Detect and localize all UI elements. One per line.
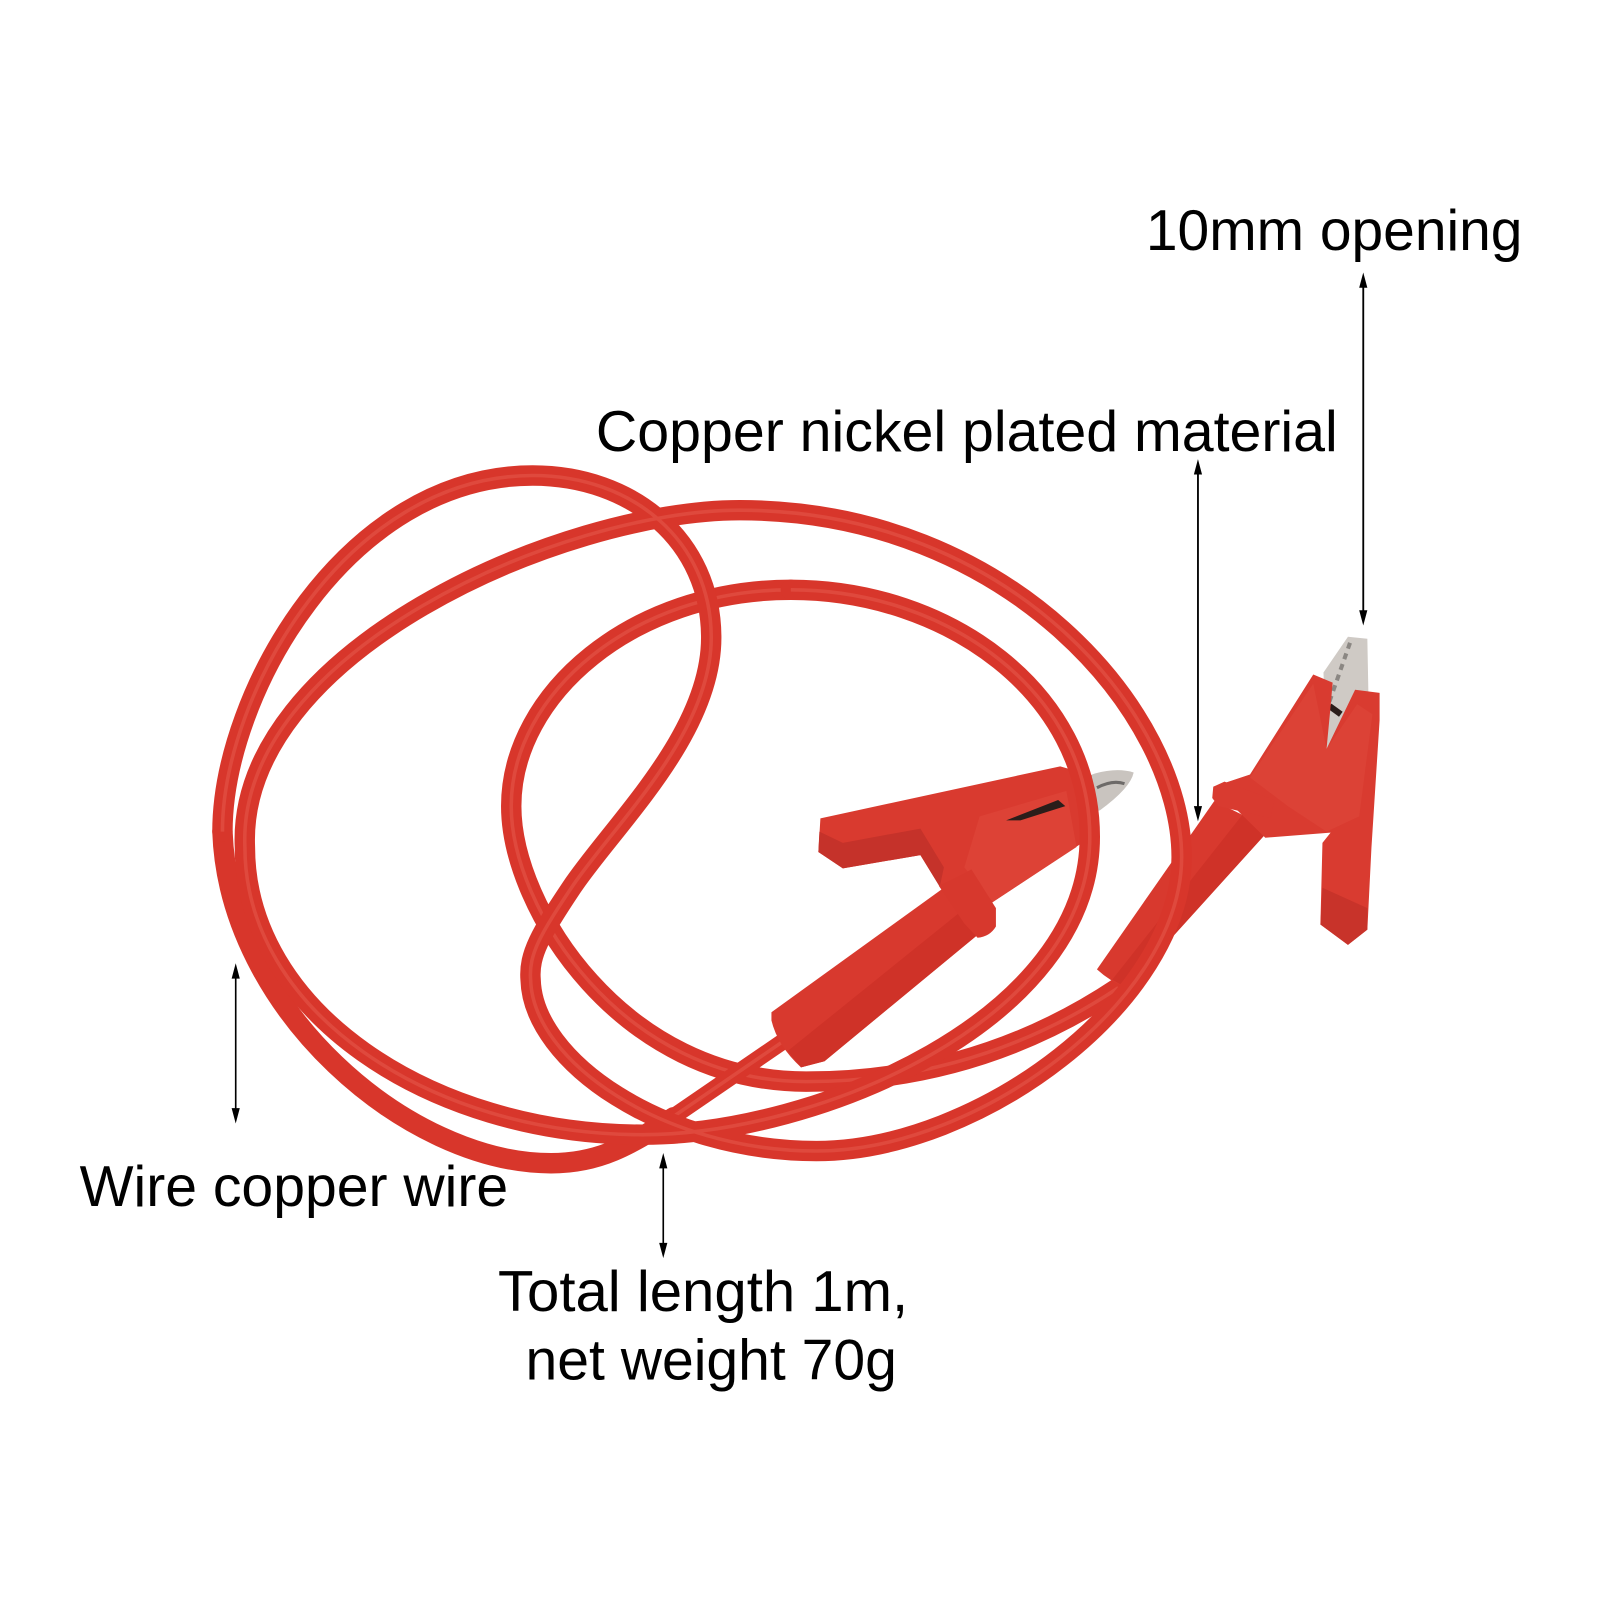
product: red test lead cable with two clips [222, 476, 1380, 1163]
silver jaw tip [1061, 770, 1134, 822]
handle sleeve [1097, 801, 1270, 988]
arrow: total length [659, 1153, 667, 1258]
central alligator clip [771, 766, 1134, 1067]
arrow: wire copper wire [232, 963, 240, 1123]
handle sleeve [771, 888, 977, 1067]
label: total length and net weight: net weight 70g [526, 1329, 897, 1393]
label: wire copper wire: Wire copper wire [80, 1155, 508, 1219]
arrow: 10mm opening [1359, 272, 1367, 626]
jaw slot [1006, 800, 1065, 820]
right alligator clip [1097, 637, 1380, 988]
cable: rear strand running to the central clip [222, 832, 796, 1163]
label: total length and net weight [498, 1260, 908, 1393]
clip collar [1212, 782, 1274, 818]
label: 10mm opening: 10mm opening [1146, 199, 1522, 263]
silver jaw [1323, 637, 1368, 750]
clip collar [939, 869, 996, 938]
cable: inner loop strand (back layer) [511, 590, 1118, 1082]
cable: main front spiral strands [222, 476, 1182, 1151]
label: total length and net weight: Total length 1m, [498, 1260, 908, 1324]
label: copper nickel plated material: Copper nickel plated material [596, 400, 1338, 464]
clip body [1213, 674, 1380, 945]
clip body [818, 766, 1092, 918]
arrow: copper nickel plated material [1194, 459, 1202, 821]
